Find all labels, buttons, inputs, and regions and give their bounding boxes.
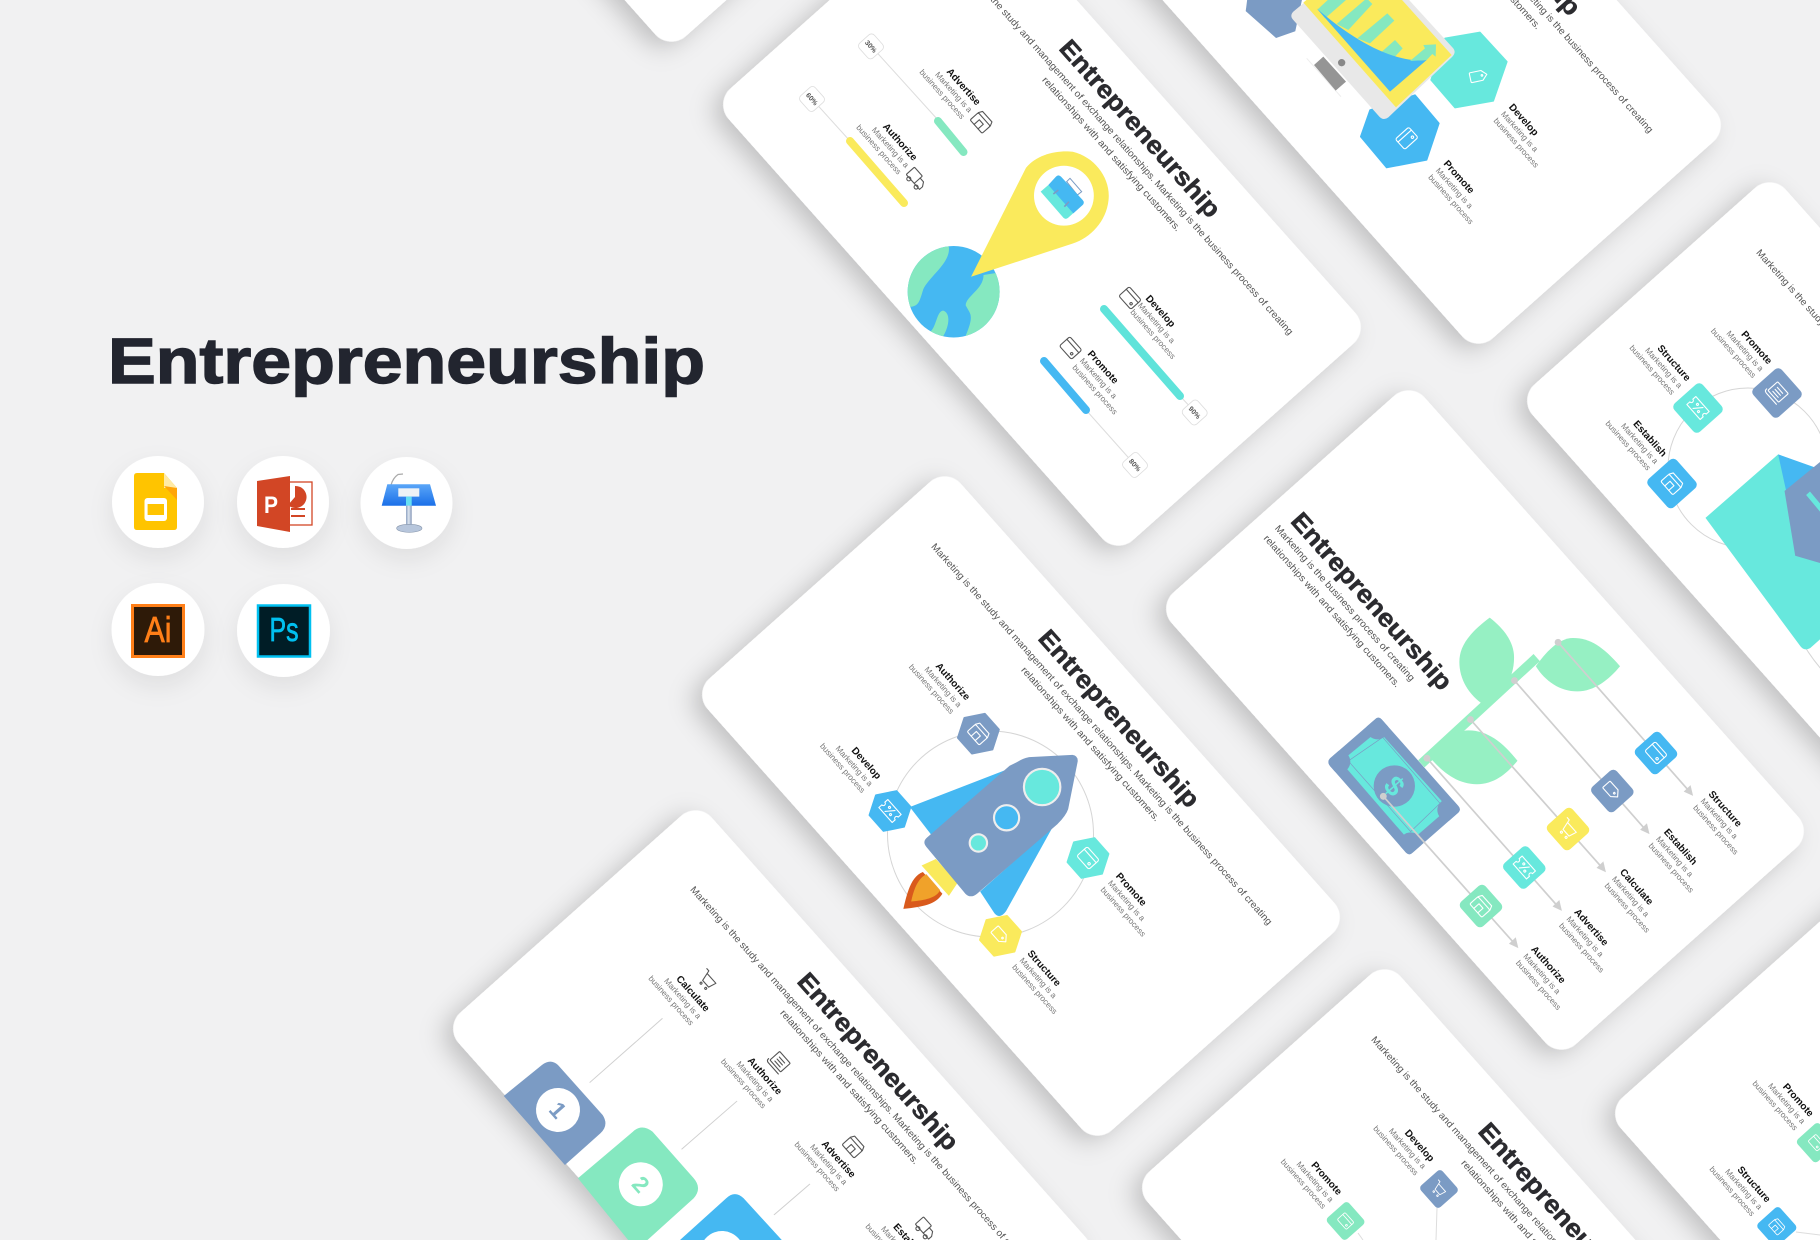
bar: Develop bbox=[1104, 309, 1195, 412]
slide description: Marketing is the business process of creating bbox=[1272, 523, 1417, 684]
item: Advertise: Marketing is a bbox=[933, 70, 974, 115]
item: Promote: Marketing is a bbox=[1294, 1160, 1335, 1204]
icon: card bbox=[1059, 337, 1082, 359]
item: Promote bbox=[1751, 1065, 1816, 1133]
icon: PowerPoint: P bbox=[264, 492, 278, 519]
item: Promote: business process bbox=[1751, 1079, 1799, 1132]
item: Structure: Structure bbox=[1025, 948, 1063, 989]
bar: Promote bbox=[1044, 361, 1135, 465]
connector line bbox=[1796, 1232, 1820, 1235]
item: Structure: Structure bbox=[1735, 1165, 1773, 1205]
item: Authorize: Marketing is a bbox=[870, 126, 911, 170]
item: Promote: Marketing is a bbox=[1434, 166, 1475, 211]
item: Authorize bbox=[907, 648, 972, 716]
item: Structure: business process bbox=[1628, 343, 1676, 397]
node: Promote bbox=[1325, 1201, 1366, 1240]
item: Authorize: business process bbox=[1514, 959, 1563, 1012]
item: Advertise bbox=[918, 53, 983, 121]
icon: Photoshop bbox=[237, 584, 330, 677]
item: Authorize: business process bbox=[719, 1057, 768, 1110]
item: Promote bbox=[1426, 159, 1491, 226]
item: Promote: Promote bbox=[1739, 329, 1774, 367]
item: Structure: business process bbox=[1691, 803, 1740, 857]
orbit ring bbox=[888, 731, 1094, 937]
number 2: 2 bbox=[627, 1171, 655, 1198]
item: Establish bbox=[1647, 827, 1711, 895]
item: Develop: business process bbox=[1128, 308, 1177, 361]
item: Authorize: Authorize bbox=[745, 1056, 784, 1098]
item: Promote bbox=[1279, 1143, 1344, 1211]
item: Structure bbox=[1691, 789, 1756, 857]
item: Promote: Promote bbox=[1113, 871, 1149, 909]
item: Advertise: Advertise bbox=[819, 1139, 858, 1181]
item: Structure: Marketing is a bbox=[1699, 797, 1740, 841]
item: Structure bbox=[1708, 1150, 1773, 1218]
item: Authorize: Authorize bbox=[1528, 944, 1568, 986]
value: 30%: 30% bbox=[863, 40, 878, 55]
node: Structure bbox=[1756, 1206, 1798, 1240]
item: Authorize bbox=[854, 109, 919, 177]
connector arrows bbox=[1380, 639, 1693, 948]
number 1: 1 bbox=[544, 1097, 572, 1124]
item: Structure: business process bbox=[1010, 963, 1059, 1016]
item: Promote: Promote bbox=[1780, 1082, 1816, 1120]
main title: Entrepreneurship bbox=[108, 325, 705, 397]
item: Authorize: Marketing is a bbox=[923, 665, 963, 709]
number 1 bbox=[527, 1079, 589, 1141]
item: Authorize: Marketing is a bbox=[735, 1060, 775, 1104]
illustration: tablet chart with hexagons bbox=[1291, 0, 1507, 168]
item: Promote: Promote bbox=[1441, 159, 1476, 197]
item: Advertise: business process bbox=[793, 1140, 841, 1193]
dollar sign: $ bbox=[1378, 770, 1411, 802]
item: Establish: Establish bbox=[1631, 419, 1668, 459]
bar: Authorize bbox=[812, 99, 904, 203]
slide title: Entrepreneurship bbox=[792, 967, 964, 1156]
node: Structure bbox=[1633, 730, 1679, 776]
icon: cart bbox=[696, 969, 718, 991]
item: Structure: business process bbox=[1708, 1165, 1756, 1218]
item: Calculate bbox=[647, 960, 712, 1028]
item: Advertise bbox=[793, 1126, 858, 1194]
item: Advertise: business process bbox=[918, 68, 966, 121]
node: Authorize bbox=[1458, 883, 1504, 929]
card: device slide bbox=[1074, 0, 1730, 353]
slide description: Marketing is the study and management of exchange relationships. Marketing is the business process of creating bbox=[929, 542, 1274, 927]
icon: card bbox=[1395, 127, 1418, 150]
node: Establish bbox=[1589, 768, 1636, 814]
item: Develop bbox=[1371, 1110, 1436, 1178]
slide description: relationships with and satisfying customers. bbox=[1261, 533, 1402, 690]
item: Promote: Promote bbox=[1308, 1160, 1344, 1198]
item: Establish bbox=[1604, 405, 1669, 473]
item: Develop: Marketing is a bbox=[1136, 301, 1177, 345]
card: lower middle slide bbox=[1133, 960, 1789, 1240]
card: lower right slide bbox=[1606, 886, 1820, 1240]
illustration: banknote bbox=[1328, 717, 1460, 854]
node: Authorize bbox=[951, 706, 1006, 761]
node: Promote bbox=[1750, 366, 1804, 420]
illustration: globe and pin bbox=[899, 151, 1109, 339]
item: Promote: business process bbox=[1709, 327, 1758, 380]
item: Authorize bbox=[719, 1043, 784, 1111]
item: Develop: business process bbox=[1492, 116, 1540, 170]
value: 80%: 80% bbox=[1127, 458, 1142, 474]
item: Calculate: business process bbox=[647, 974, 695, 1027]
item: Authorize: business process bbox=[854, 123, 903, 176]
item: Structure: Structure bbox=[1706, 789, 1744, 830]
item: Establish: Marketing is a bbox=[1654, 835, 1695, 879]
icon: Keynote bbox=[360, 457, 452, 549]
item: Structure bbox=[1010, 948, 1075, 1016]
item: Promote: business process bbox=[1070, 363, 1119, 416]
item: Promote: Marketing is a bbox=[1078, 356, 1119, 401]
item: Establish bbox=[864, 1208, 929, 1240]
item: Structure bbox=[1628, 329, 1693, 397]
item: Develop: Marketing is a bbox=[1499, 110, 1540, 154]
illustration: back hexagon bbox=[1246, 0, 1304, 38]
item: Develop: Develop bbox=[849, 745, 883, 782]
card: rocket slide bbox=[693, 467, 1349, 1145]
item: Advertise: Marketing is a bbox=[1564, 915, 1605, 959]
node: Promote bbox=[1061, 830, 1115, 886]
item: Advertise: Advertise bbox=[944, 67, 983, 108]
illustration: plant bbox=[1421, 618, 1620, 784]
item: Advertise bbox=[1557, 907, 1622, 975]
item: Structure: Structure bbox=[1655, 343, 1693, 384]
item: Authorize bbox=[1514, 944, 1579, 1012]
item: Authorize: business process bbox=[907, 663, 956, 716]
item: Promote: business process bbox=[1426, 173, 1475, 226]
node: Develop bbox=[863, 783, 917, 839]
item: Calculate: Marketing is a bbox=[662, 977, 703, 1021]
connector lines bbox=[1358, 1208, 1437, 1240]
node: Structure bbox=[973, 908, 1028, 963]
item: Establish: Marketing is a bbox=[1619, 422, 1660, 466]
illustration: rocket bbox=[903, 755, 1078, 916]
icon: Google Slides bbox=[112, 456, 204, 548]
slide title: Entrepreneurship bbox=[1054, 34, 1226, 223]
card: numbered steps slide bbox=[444, 801, 1100, 1240]
icon: Photoshop: Ps bbox=[270, 611, 298, 648]
card: location pin slide bbox=[714, 0, 1370, 555]
number 3 bbox=[691, 1222, 753, 1240]
value: 30% bbox=[857, 32, 885, 61]
item: Authorize: Authorize bbox=[933, 661, 972, 703]
item: Promote bbox=[1070, 349, 1135, 416]
item: Structure: Marketing is a bbox=[1018, 956, 1059, 1000]
value: 60% bbox=[798, 85, 826, 113]
icon: document bbox=[766, 1050, 790, 1074]
value: 90%: 90% bbox=[1187, 406, 1202, 421]
item: Develop: Develop bbox=[1143, 293, 1177, 330]
item: Advertise: Advertise bbox=[1572, 907, 1610, 949]
item: Develop: business process bbox=[1371, 1124, 1420, 1177]
card: top-left partial slide bbox=[267, 0, 923, 51]
slide description: relationships with and satisfying customers. bbox=[1018, 665, 1162, 824]
icon: PowerPoint bbox=[237, 456, 329, 548]
item: Develop: Marketing is a bbox=[1387, 1127, 1428, 1171]
item: Develop: Develop bbox=[1402, 1128, 1436, 1164]
icon: tag bbox=[1469, 69, 1488, 83]
icon: shop bbox=[842, 1135, 865, 1158]
item: Develop bbox=[1492, 102, 1556, 170]
item: Develop: Develop bbox=[1506, 102, 1540, 138]
slide title: Entrepreneurship bbox=[1033, 624, 1205, 813]
number 2 bbox=[610, 1153, 672, 1215]
icon: truck bbox=[904, 167, 928, 191]
item: Develop bbox=[818, 727, 883, 795]
illustration: envelope bbox=[1705, 451, 1820, 649]
item: Promote: Marketing is a bbox=[1725, 329, 1765, 373]
item: Structure: Marketing is a bbox=[1643, 346, 1684, 390]
slide description: relationships with and satisfying customers. bbox=[1039, 75, 1183, 234]
number tiles bbox=[504, 1018, 810, 1240]
node: Structure bbox=[1671, 381, 1725, 435]
item: Promote: Marketing is a bbox=[1106, 879, 1147, 923]
item: Promote: Marketing is a bbox=[1766, 1082, 1807, 1126]
item: Calculate: Marketing is a bbox=[1610, 875, 1651, 919]
item: Calculate: Calculate bbox=[1617, 867, 1655, 908]
item: Authorize: Marketing is a bbox=[1521, 952, 1562, 996]
item: Develop bbox=[1128, 293, 1193, 361]
item: Advertise: business process bbox=[1557, 921, 1606, 975]
bar: Advertise bbox=[871, 46, 964, 152]
item: Calculate bbox=[1603, 867, 1667, 935]
item: Establish: business process bbox=[1604, 419, 1652, 472]
value: 90% bbox=[1181, 398, 1209, 427]
item: Promote: business process bbox=[1279, 1157, 1328, 1211]
node: Develop bbox=[1419, 1169, 1459, 1209]
card: envelope slide bbox=[1518, 173, 1820, 851]
item: Develop: Marketing is a bbox=[834, 744, 875, 788]
item: Authorize: Authorize bbox=[880, 122, 919, 164]
item: Promote bbox=[1709, 312, 1774, 380]
item: Promote bbox=[1099, 871, 1163, 939]
slide title: Entrepreneurship bbox=[1285, 507, 1458, 696]
icon: Illustrator: Ai bbox=[144, 609, 172, 650]
node: Advertise bbox=[1501, 844, 1548, 891]
icon: bag bbox=[1119, 287, 1141, 309]
illustration: briefcase bbox=[1041, 175, 1084, 219]
item: Advertise: Marketing is a bbox=[808, 1143, 849, 1187]
item: Promote: Promote bbox=[1085, 349, 1120, 387]
item: Establish: business process bbox=[1647, 841, 1695, 895]
ring bbox=[1668, 388, 1820, 670]
card: plant and money slide bbox=[1157, 381, 1813, 1059]
item: Calculate: Calculate bbox=[674, 974, 712, 1015]
icon: Illustrator bbox=[112, 583, 204, 676]
slide description: relationships with and satisfying customers. bbox=[777, 1008, 921, 1167]
item: Develop: business process bbox=[818, 742, 867, 795]
icon: truck bbox=[913, 1217, 937, 1240]
node: Calculate bbox=[1545, 806, 1591, 852]
value: 60%: 60% bbox=[804, 92, 819, 108]
item: Structure: Marketing is a bbox=[1723, 1167, 1764, 1212]
item: Promote: business process bbox=[1099, 885, 1147, 939]
node: Establish bbox=[1645, 457, 1699, 510]
value: 80% bbox=[1121, 451, 1149, 479]
item: Calculate: business process bbox=[1603, 881, 1651, 935]
icon: shop bbox=[970, 110, 993, 133]
item: Establish: Establish bbox=[1661, 827, 1699, 868]
node: Promote bbox=[1795, 1122, 1820, 1164]
